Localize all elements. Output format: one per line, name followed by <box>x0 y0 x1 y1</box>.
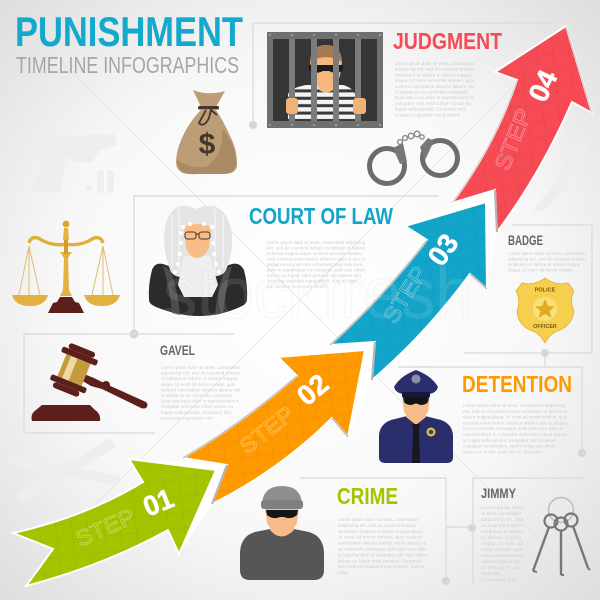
text block: detention <box>463 403 568 454</box>
text block: jimmy: minim veniam, quis <box>481 547 522 552</box>
text block: judgment: Duis aute irure dolor in reprehenderit in <box>395 95 474 100</box>
text block: jimmy: do eiusmod tempor <box>481 523 522 528</box>
label: step 02: STEP <box>235 401 299 459</box>
text block: jimmy: adipiscing elit, sed <box>481 517 524 522</box>
label: step 03: STEP <box>378 262 432 328</box>
wig <box>164 206 232 277</box>
sweater <box>240 529 324 580</box>
shield <box>426 428 436 436</box>
text block: crime: Lorem ipsum dolor sit amet, consectetur <box>338 517 419 522</box>
text block: jimmy: commodo <box>481 571 500 576</box>
text block: gavel: aliqua. Ut enim ad minim veniam, quis <box>161 382 235 387</box>
text block: court of law: elit, sed do eiusmod tempor incididunt ut labore <box>267 246 366 250</box>
frame: jimmy <box>473 478 584 585</box>
number: 03: 03 <box>422 228 465 271</box>
text block: crime: culpa <box>338 570 349 575</box>
text block: crime: adipiscing elit, sed do eiusmod tempor <box>338 523 417 528</box>
text block: jimmy <box>481 505 524 582</box>
text block: badge: Lorem ipsum dolor sit amet, consectetur <box>508 251 587 256</box>
icon: judge <box>149 206 247 316</box>
icon: police badge <box>516 278 574 343</box>
text block: jimmy: et dolore magna <box>481 535 522 540</box>
text block: gavel: Lorem ipsum dolor sit amet, consectetur <box>161 365 241 370</box>
beanie <box>262 486 302 506</box>
text block: gavel: incididunt ut labore et dolore magna <box>161 376 238 381</box>
heading: badge: BADGE <box>508 232 543 248</box>
text block: badge: adipiscing elit, sed do eiusmod tempor <box>508 256 587 262</box>
text block: detention: reprehenderit in voluptate velit esse cillum dolore <box>463 432 568 437</box>
frame: detention <box>398 367 586 457</box>
neck and face <box>406 408 426 425</box>
title: PUNISHMENT <box>15 8 243 55</box>
icon: keys <box>533 498 590 575</box>
sunglasses <box>403 397 429 405</box>
text block: detention: cupidatat non proident, sunt in culpa qui officia <box>463 444 556 449</box>
text block: crime <box>338 517 428 575</box>
robe <box>149 264 247 316</box>
text block: gavel: fugiat nulla pariatur. Excepteur sint <box>161 410 232 415</box>
text block: court of law: Lorem ipsum dolor sit amet, consectetur adipiscing <box>267 240 366 245</box>
text block: judgment: adipiscing elit, sed do eiusmod tempor <box>395 67 475 72</box>
text block: crime: incididunt ut labore et dolore magna aliqua. <box>338 529 424 534</box>
text block: crime: sint occaecat cupidatat non proident, sunt in <box>338 564 425 569</box>
text block: detention: Lorem ipsum dolor sit amet, consectetur adipiscing <box>463 403 566 408</box>
heading: court of law: COURT OF LAW <box>249 203 393 229</box>
icon: prisoner behind bars <box>267 32 383 128</box>
text block: court of law: occaecat cupidatat non proident, sunt in culpa <box>267 278 358 284</box>
text block: gavel: occaecat cupidatat non <box>161 415 214 420</box>
icon: handcuffs <box>370 131 458 184</box>
text block: judgment: fugiat nulla pariatur. Excepteur sint <box>395 107 466 112</box>
dollar sign: $ <box>199 128 216 161</box>
arrow: step 01 <box>13 459 227 586</box>
heading: detention: DETENTION <box>462 371 572 397</box>
text block: jimmy: aliqua. Ut enim ad <box>481 541 524 546</box>
glasses <box>185 232 210 239</box>
frame: crime <box>300 478 476 585</box>
text block: court of law: dolor in reprehenderit in voluptate velit esse cillum <box>267 268 365 272</box>
mask <box>266 510 298 518</box>
hat <box>394 370 438 394</box>
text block: gavel: voluptate velit esse cillum dolore eu <box>161 404 234 409</box>
text block: judgment <box>395 61 475 117</box>
text block: judgment: voluptate velit esse cillum dolore eu <box>395 101 472 106</box>
text block: court of law: aliquip ex ea commodo consequat. Duis aute irure <box>267 262 363 267</box>
watermark: stockfresh <box>163 254 473 334</box>
badge: police: POLICE <box>535 288 556 294</box>
prisoner <box>288 45 355 121</box>
text block: court of law: et dolore magna aliqua. Ut enim ad minim veniam, <box>267 251 363 256</box>
text block: court of law <box>267 240 366 289</box>
text block: jimmy: ullamco laboris nisi <box>481 559 521 564</box>
text block: detention: deserunt mollit anim id est laborum <box>463 449 541 454</box>
text block: crime: in reprehenderit in voluptate velit esse cillum <box>338 552 427 557</box>
text block: judgment: aliqua. Ut enim ad minim veniam, quis <box>395 78 474 83</box>
head <box>47 341 101 399</box>
frame: judgment <box>249 23 553 129</box>
text block: gavel: Duis aute irure dolor in reprehenderit in <box>161 399 240 404</box>
handle <box>81 374 148 408</box>
icon: police officer <box>379 370 453 463</box>
label: step 04: STEP <box>489 105 537 174</box>
text block: badge: incididunt ut labore et dolore magna <box>508 262 581 267</box>
text block: badge <box>508 251 587 272</box>
icon: criminal <box>240 486 324 580</box>
text block: crime: exercitation ullamco laboris nisi ut aliquip ex <box>338 541 427 546</box>
heading: jimmy: JIMMY <box>481 485 517 501</box>
frame: court of law <box>130 196 439 338</box>
text block: detention: ex ea commodo consequat. Duis aute irure dolor in <box>463 426 564 431</box>
icon: gavel <box>32 341 148 421</box>
text block: detention: dolore magna aliqua. Ut enim ad minim veniam, quis <box>463 415 567 420</box>
icon: tape rulers (ghost) <box>8 438 120 503</box>
text block: jimmy: sit amet, consectetur <box>481 511 522 516</box>
text block: crime: Ut enim ad minim veniam, quis nostrud <box>338 535 423 540</box>
heading: gavel: GAVEL <box>160 342 195 358</box>
heading: judgment: JUDGMENT <box>393 28 502 54</box>
text block: detention: nostrud exercitation ullamco laboris nisi ut aliquip <box>463 420 568 425</box>
text block: jimmy: Lorem ipsum dolor <box>481 505 524 510</box>
text block: gavel: adipiscing elit, sed do eiusmod tempor <box>161 371 241 376</box>
heading: crime: CRIME <box>337 483 398 509</box>
text block: judgment: ut aliquip ex ea commodo consequat. <box>395 90 469 94</box>
text block: jimmy: incididunt ut labore <box>481 529 524 534</box>
text block: jimmy: nostrud exercitation <box>481 553 524 558</box>
icon: scales <box>12 221 120 313</box>
label: step 01: STEP <box>72 504 139 552</box>
text block: judgment: nostrud exercitation ullamco laboris nisi <box>395 84 474 89</box>
text block: judgment: Lorem ipsum dolor sit amet, consectetur <box>395 61 475 66</box>
sound block <box>32 405 100 421</box>
uniform <box>379 416 453 463</box>
text block: jimmy: consequat duis <box>481 577 517 582</box>
text block: detention: eu fugiat nulla pariatur. Excepteur sint occaecat <box>463 438 556 443</box>
badge: officer: OFFICER <box>533 324 557 330</box>
arrow: step 04 <box>452 26 592 232</box>
text block: court of law: qui officia deserunt mollit <box>267 284 328 289</box>
icon: money bag <box>176 90 237 174</box>
text block: crime: ea commodo consequat. Duis aute irure dolor <box>338 546 428 552</box>
jabot <box>178 256 218 297</box>
text block: gavel: nostrud exercitation ullamco laboris nisi <box>161 387 240 392</box>
text block: detention: elit, sed do eiusmod tempor incididunt ut labore et <box>463 409 568 414</box>
text block: gavel: ut aliquip ex ea commodo consequat. <box>161 393 233 398</box>
text block: court of law: dolore eu fugiat nulla pariatur. Excepteur sint <box>267 273 362 278</box>
text block: court of law: quis nostrud exercitation ullamco laboris nisi ut <box>267 256 366 262</box>
text block: judgment: occaecat cupidatat non proident <box>395 112 460 117</box>
arrow: step 02 <box>183 342 375 504</box>
number: 04: 04 <box>522 65 564 107</box>
text block: judgment: incididunt ut labore et dolore magna <box>395 72 472 77</box>
text block: badge: aliqua. Ut enim ad minim veniam <box>508 268 573 272</box>
icon: knife (ghost) <box>531 144 592 214</box>
number: 01: 01 <box>139 483 178 523</box>
text block: gavel <box>161 365 241 420</box>
frame: gavel <box>24 334 234 433</box>
text block: jimmy: ut aliquip ex ea <box>481 565 520 570</box>
text block: crime: dolore eu fugiat nulla pariatur. Excepteur <box>338 558 423 563</box>
tie <box>412 424 420 463</box>
number: 02: 02 <box>291 368 335 412</box>
frame: badge <box>464 225 592 367</box>
arrow: step 03 <box>330 190 497 380</box>
subtitle: TIMELINE INFOGRAPHICS <box>16 52 239 78</box>
icon: pistol (ghost) <box>33 134 117 193</box>
face <box>184 224 211 258</box>
neck and face <box>270 520 294 536</box>
